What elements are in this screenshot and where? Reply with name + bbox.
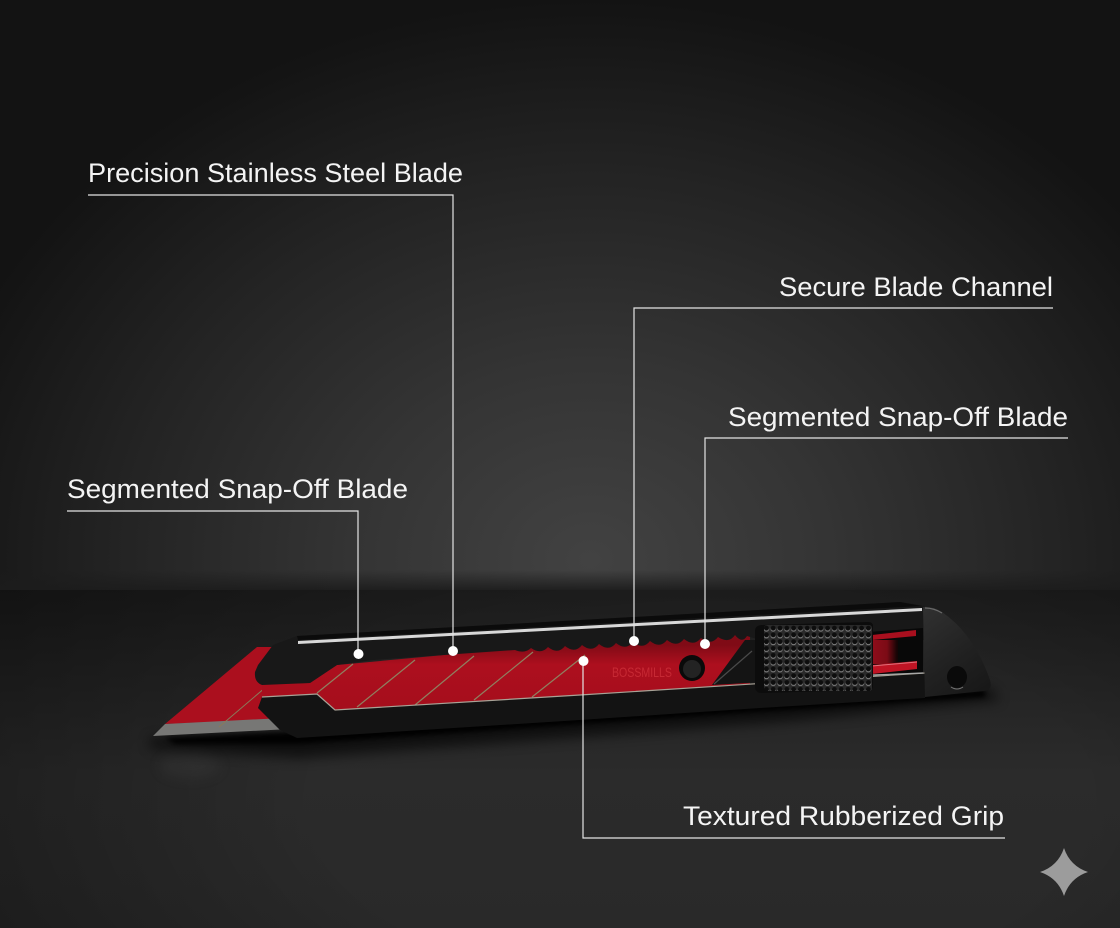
textured grip [755, 622, 873, 693]
background wall [0, 0, 1120, 590]
icon: sparkle watermark [1040, 848, 1088, 896]
label: Segmented Snap-Off Blade (right) [700, 402, 1068, 649]
label: Secure Blade Channel: Secure Blade Channel [779, 272, 1053, 302]
blade reflection on floor [160, 754, 220, 778]
slot grey wedge [714, 651, 752, 684]
black slider slot [712, 640, 765, 685]
blade tip [153, 647, 300, 736]
rear end cap [923, 607, 991, 697]
utility knife [150, 602, 1000, 758]
dark edge top of body [297, 602, 922, 640]
lower body [258, 672, 925, 738]
label: Textured Rubberized Grip: Textured Rubberized Grip [683, 801, 1004, 831]
background floor [0, 570, 1120, 928]
knife shadow [150, 688, 1000, 758]
label: Precision Stainless Steel Blade [88, 158, 463, 656]
lock button [679, 655, 705, 681]
upper body with serrated edge [255, 602, 925, 685]
label: Segmented Snap-Off Blade (left): Segmented Snap-Off Blade [67, 474, 408, 504]
label: Segmented Snap-Off Blade (left) [67, 474, 408, 659]
steel highlight [298, 608, 922, 644]
label: Secure Blade Channel [629, 272, 1053, 646]
label: Precision Stainless Steel Blade: Precision Stainless Steel Blade [88, 158, 463, 188]
embossed brand text on blade: BOSSMILLS [612, 664, 672, 680]
label: Textured Rubberized Grip [578, 656, 1005, 838]
label: Segmented Snap-Off Blade (right): Segmented Snap-Off Blade [728, 402, 1068, 432]
lower body highlight [262, 673, 925, 710]
rear red window [868, 628, 923, 676]
blade score lines [317, 652, 585, 707]
red blade in channel [262, 630, 750, 712]
